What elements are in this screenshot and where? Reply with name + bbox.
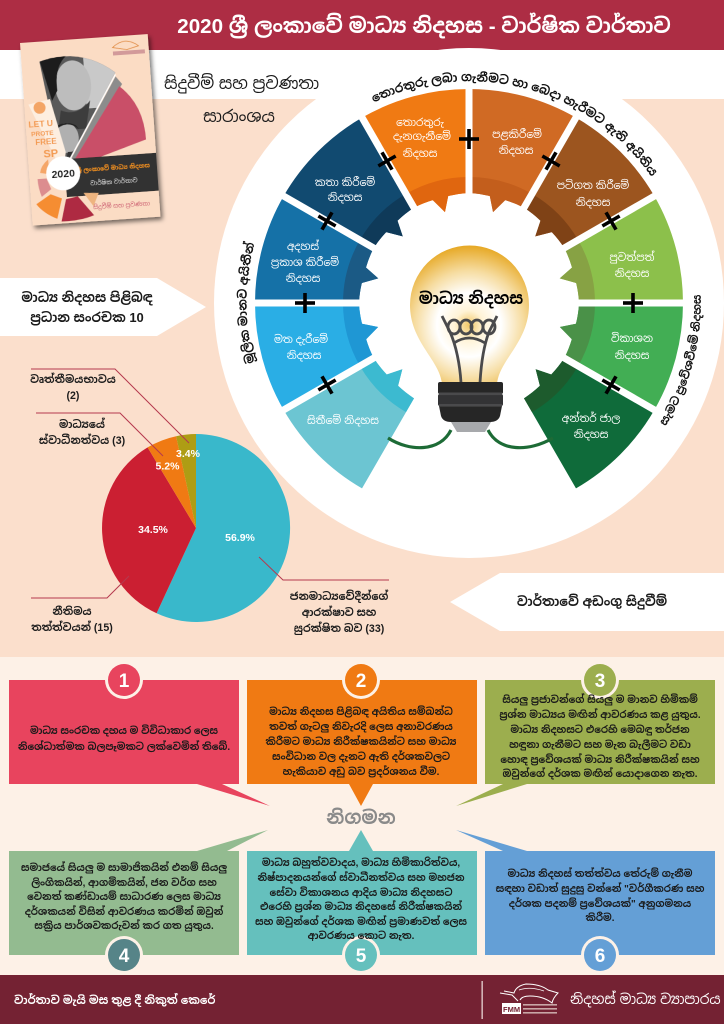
segment labels: නිදහස (328, 192, 363, 204)
title banner: 2020 ශ්‍රී ලංකාවේ මාධ්‍ය නිදහස - වාර්ෂික වාර්තාව (177, 12, 671, 39)
wheel of ten media freedoms (248, 82, 690, 493)
card 6 (456, 830, 715, 974)
report cover thumbnail: LET U (28, 118, 53, 130)
segment labels: නිදහස (287, 350, 322, 362)
card 3 (456, 661, 715, 806)
card 1: 1 (119, 671, 130, 692)
report cover thumbnail: 2020 (51, 167, 75, 181)
card 2 (247, 661, 477, 806)
segment labels: සිතීමේ නිදහස (307, 414, 379, 427)
pie label: journalists safety: ජනමාධ්‍යවේදීන්ගේ (290, 589, 388, 603)
slice: legal 34.5% (102, 447, 196, 613)
white wheel disc (214, 48, 724, 558)
card 5: මාධ්‍ය බහුත්වවාදය, මාධ්‍ය හිමිකාරිත්වය, (262, 856, 460, 869)
segment: freedom of information (360, 82, 498, 227)
slice: professionalism 3.4% (176, 434, 196, 528)
segment labels: මත දැරීමේ (274, 333, 328, 346)
card 2: හැකියාව අඩු බව ප්‍රදර්ශනය වීම. (283, 765, 440, 778)
card 6: මාධ්‍ය නිදහස් තත්ත්වය තේරුම් ගැනීම (508, 867, 693, 880)
arrow: ten main components of media freedom (0, 278, 206, 336)
segment labels: නිදහස (574, 429, 609, 441)
card 3: හඳුනා ගැනීමට සහ මැන බැලීමට වඩා (509, 739, 691, 751)
card 6: කිරීම. (586, 911, 615, 924)
card 3: හොඳ ප්‍රවේශයක් මාධ්‍ය නිරීක්ෂකයින් සහ (500, 753, 700, 766)
card 5 (247, 830, 477, 974)
segment: broadcasting freedom (545, 274, 690, 412)
segment labels: නිදහස (576, 197, 611, 209)
icon: free media movement logo: FMM (503, 1005, 520, 1014)
card 2: මාධ්‍ය නිදහස පිළිබඳ අයිතිය සම්බන්ධ (269, 705, 453, 718)
report cover thumbnail: SP (43, 148, 59, 161)
segment labels: පළකිරීමේ (492, 128, 542, 141)
organisation name: නිදහස් මාධ්‍ය ව්‍යාපාරය (570, 990, 721, 1008)
segment labels: නිදහස (499, 145, 534, 157)
bulb label: media freedom: මාධ්‍ය නිදහස (419, 290, 523, 308)
segment labels: අන්තර් ජාල (562, 411, 620, 425)
footer (0, 975, 724, 1024)
pie label: legal status: තත්ත්වයන් (15) (31, 620, 113, 634)
card 2: 2 (356, 671, 366, 692)
footer note: වාර්තාව මැයි මස තුළ දී නිකුත් කෙරේ (14, 993, 215, 1007)
segment labels: නිදහස (615, 268, 650, 280)
percentage labels: 56.9% (225, 532, 256, 544)
percentage labels (138, 448, 256, 544)
curved labels around the wheel: තොරතුරු ලබා ගැනීමට හා බෙදා හැරීමට ඇති අයිතිය (372, 71, 656, 176)
pie label: independence of media (39, 417, 125, 447)
card 3: ප්‍රශ්න මාධ්‍යය මඟින් ආවරණය කළ යුතුය. (499, 708, 701, 721)
report cover thumbnail: වාර්ෂික වාර්තාව (90, 176, 138, 187)
card 3: මාධ්‍ය නිදහසට එරෙහි මෙබඳු තර්ජන (510, 723, 690, 736)
card 4: සක්‍රිය පාර්ශවකරුවන් කර ගත යුතුය. (34, 919, 214, 932)
card 5: නිෂ්පාදනයන්ගේ ස්වාධීනත්වය සහ මහජන (257, 871, 465, 884)
pie label: independence of media: ස්වාධීනත්වය (3) (39, 433, 125, 447)
arrow: ten main components of media freedom: මාධ්‍ය නිදහස පිළිබඳ (21, 290, 154, 306)
segment labels: නිදහස (615, 350, 650, 362)
percentage labels: 34.5% (138, 524, 169, 536)
card 4: දර්ශකයන් විසින් ආවරණය කරමින් ඔවුන් (25, 905, 224, 918)
pie chart (102, 434, 290, 622)
segment: internet freedom (496, 330, 659, 493)
card 6: දර්ශක පදනම් ප්‍රවේශයක්" අනුගමනය (509, 897, 692, 910)
icon: light bulb (388, 246, 553, 448)
card 3: ඔවුන්ගේ දර්ශක මඟින් යොදාගෙන නැත. (502, 767, 698, 780)
card 5: ආවරණය කොට නැත. (308, 930, 415, 942)
card 5: 5 (356, 946, 367, 967)
plus signs between segments (295, 129, 643, 399)
card 5: සහ ඔවුන්ගේ දර්ශක මඟින් ප්‍රමාණවත් ලෙස (255, 915, 467, 928)
card 3: සියලු ප්‍රජාවන්ගේ සියලු ම මානව හිමිකම් (502, 693, 698, 706)
percentage labels: 5.2% (156, 460, 180, 472)
pie label: professionalism: වෘත්තීමයභාවය (30, 372, 116, 386)
segment labels: කතා කිරීමේ (315, 176, 375, 189)
segment: freedom of opinion (248, 274, 393, 412)
report cover thumbnail: සිදුවීම් සහ ප්‍රවණතා (93, 199, 150, 211)
curved labels around the wheel (236, 71, 704, 426)
segment labels: දැනගැනීමේ (393, 130, 451, 143)
percentage labels: 3.4% (176, 448, 201, 460)
heading: events and trends summary (164, 73, 319, 126)
segment labels: අදහස් (287, 239, 319, 253)
curved labels around the wheel: මූලික මානව අයිතීන් (236, 240, 258, 364)
card 6: සඳහා වඩාත් සුදුසු වන්නේ "වර්ගීකරණ සහ (496, 882, 705, 895)
card 2: කිරීමට මාධ්‍ය නිරීක්ෂකයින්ට සහ මාධ්‍ය (266, 735, 457, 748)
segment: freedom of expression (248, 194, 393, 332)
heading: events and trends summary: සිදුවීම් සහ ප්‍රවණතා (164, 73, 319, 93)
slice: safety 56.9% (157, 434, 290, 622)
pie label: legal status: නීතිමය (52, 605, 92, 618)
card 6: 6 (595, 946, 605, 967)
icon: free media movement logo (500, 984, 558, 1014)
heading: conclusion: නිගමන (326, 807, 396, 828)
segment: newspaper freedom (545, 194, 690, 332)
card 4: ලිංගිකයින්, ආගමිකයින්, ජන වර්ග සහ (31, 876, 217, 889)
segment labels: ප්‍රකාශ කිරීමේ (271, 256, 339, 269)
card 2: තවත් ගැටලු නිවැරදි ලෙස අනාවරණය (269, 720, 453, 733)
segment: freedom of recording (496, 113, 659, 276)
segment labels: නිදහස (286, 273, 321, 285)
pie label: professionalism (30, 372, 116, 402)
slice: independence 5.2% (148, 436, 196, 528)
card 4: සමාජයේ සියලු ම සාමාජිකයින් එනම් සියලු (21, 861, 227, 874)
segment: freedom of publication (440, 82, 578, 227)
segment labels: නිදහස (403, 148, 438, 160)
title banner (0, 0, 724, 50)
segment labels: විකාශන (611, 332, 653, 345)
card 4: 4 (119, 946, 130, 967)
segment labels: පටිගත කිරීමේ (557, 179, 629, 192)
card 2: සංවිධාන වල දැනට ඇති දර්ශකවලට (272, 750, 450, 763)
segment: freedom of speech (279, 113, 442, 276)
panel: conclusion (0, 657, 724, 975)
arrow: events included in the report (450, 573, 724, 631)
report cover thumbnail: ශ්‍රී ලංකාවේ මාධ්‍ය නිදහස (75, 161, 151, 174)
arrow: ten main components of media freedom: ප්‍රධාන සංරචක 10 (30, 310, 144, 325)
arrow: events included in the report: වාර්තාවේ අඩංගු සිදුවීම් (517, 593, 667, 610)
card 3: 3 (595, 671, 605, 692)
pie label: legal status (31, 605, 113, 634)
heading: events and trends summary: සාරාංශය (203, 108, 275, 126)
report cover thumbnail (20, 34, 160, 226)
report cover thumbnail: PROTE (31, 130, 54, 138)
card 5: සේවා විකාශනය ආදිය මාධ්‍ය නිදහසට (269, 886, 453, 899)
card 1: මාධ්‍ය සංරචක දහය ම විවිධාකාර ලෙස (30, 724, 218, 737)
pie label: professionalism: (2) (67, 390, 79, 402)
card 1 (9, 661, 270, 806)
pie label: journalists safety (290, 589, 388, 635)
card 4: වෙනත් කණ්ඩායම් සාධාරණ ලෙස මාධ්‍ය (27, 890, 221, 903)
report cover thumbnail: FREE (35, 137, 58, 147)
segment labels: තොරතුරු (396, 117, 445, 129)
segment labels (271, 117, 655, 441)
segment: freedom of thought (279, 330, 442, 493)
curved labels around the wheel: සැමට ප්‍රවේශවීමේ නිදහස (660, 295, 704, 426)
card 4 (9, 830, 268, 974)
segment labels: පුවත්පත් (609, 250, 655, 264)
card 5: එරෙහි ප්‍රශ්න මාධ්‍ය නිදහසේ නිරීක්ෂකයින් (260, 900, 462, 913)
pie label: journalists safety: සුරක්ෂිත බව (33) (294, 621, 384, 635)
pie label: independence of media: මාධ්‍යයේ (59, 417, 106, 431)
pie label: journalists safety: ආරක්ෂාව සහ (302, 605, 377, 619)
card 1: නිශේධාත්මක බලපෑමකට ලක්වෙමින් තිබේ. (18, 740, 230, 753)
